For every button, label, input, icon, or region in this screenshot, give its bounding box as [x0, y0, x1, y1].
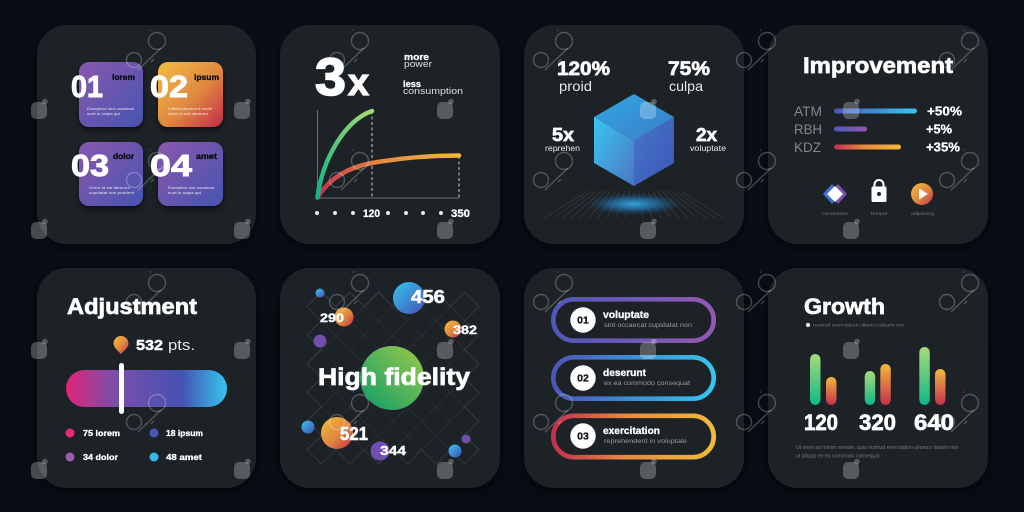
bar chart — [810, 347, 946, 405]
bubble values: 382 — [453, 323, 477, 337]
icon captions: consectetur — [822, 211, 849, 216]
bubble values: 344 — [380, 443, 407, 458]
tile 04: 04 — [150, 148, 193, 183]
bar row ATM: +50% — [927, 104, 962, 118]
stat 5x reprehen: 5x — [552, 125, 574, 145]
x axis scale: 120 — [363, 208, 380, 220]
subheading: nostrud exercitation ullamco laboris nisi — [813, 322, 904, 328]
step 01: sint occaecat cupidatat non — [604, 322, 692, 329]
legend: 18 ipsum — [166, 429, 203, 438]
stat 5x reprehen: reprehen — [545, 144, 580, 153]
bar values: 320 — [859, 410, 896, 435]
icon: play — [911, 183, 933, 205]
tile 02 — [150, 62, 223, 127]
tile 03: dolor — [113, 152, 134, 161]
heading: Adjustment — [67, 294, 198, 319]
tile 02: 02 — [150, 69, 188, 104]
legend: 75 lorem — [83, 429, 120, 438]
headline 3x: x — [348, 62, 369, 104]
watermark: looped line marks — [126, 30, 978, 432]
paragraph: Ut enim ad minim veniam, quis nostrud exercitation ullamco laboris nisi — [796, 445, 958, 451]
panel: numbered steps — [524, 268, 744, 488]
stat 75% culpa — [668, 59, 710, 94]
headline 3x — [315, 48, 369, 107]
more power — [404, 52, 432, 69]
tile 03 — [71, 142, 143, 206]
step 02: ex ea commodo consequat — [604, 380, 690, 387]
stat 120% proid: 120% — [557, 59, 610, 80]
bar row KDZ: +35% — [926, 140, 960, 154]
tile 03: Orem id est laborum — [89, 185, 131, 190]
bar row RBH — [794, 122, 952, 137]
paragraph: ut aliquip ex ea commodo consequat. — [796, 454, 881, 460]
stat 75% culpa: culpa — [669, 78, 703, 94]
step 03 — [553, 416, 714, 457]
step 01 — [553, 299, 714, 341]
less consumption: less — [403, 79, 421, 89]
heading: High fidelity — [318, 364, 471, 391]
panel: numbered tiles — [37, 25, 256, 244]
stat 75% culpa: 75% — [668, 59, 710, 80]
stat 2x voluptate: voluptate — [690, 144, 727, 153]
heading: Improvement — [803, 53, 954, 78]
tile 01: lorem — [112, 73, 135, 82]
tile 03: cupidatat non proident — [89, 190, 135, 195]
tile 02: ipsum — [194, 73, 219, 82]
step 02 — [553, 357, 714, 399]
bubble values: 456 — [411, 287, 445, 307]
step 03: 03 — [577, 431, 589, 443]
panel: adjustment — [37, 268, 256, 488]
legend: 34 dolor — [83, 453, 118, 462]
bar values: 120 — [804, 410, 838, 435]
x axis scale: 350 — [451, 208, 470, 220]
icon: diamond — [823, 184, 847, 204]
paragraph — [796, 445, 958, 460]
bubbles — [302, 282, 470, 460]
line chart — [318, 110, 459, 198]
bubble values — [320, 287, 477, 458]
bar row KDZ: KDZ — [794, 140, 821, 155]
tile 01: Excepteur sint occaecat — [87, 106, 135, 111]
step 02: 02 — [577, 373, 589, 385]
tile 01: sunt in culpa qui — [87, 111, 120, 116]
icon: lock — [872, 180, 886, 202]
bubble values: 521 — [340, 424, 368, 444]
icon: pin — [114, 336, 128, 354]
panel: growth — [768, 268, 988, 488]
icon captions — [822, 211, 935, 216]
tile 01: 01 — [71, 69, 103, 104]
bar row RBH: +5% — [926, 122, 952, 136]
panel: cube stats — [524, 25, 744, 244]
icon captions: tempor — [871, 211, 889, 216]
step 03: exercitation — [603, 426, 660, 437]
tile 03: 03 — [71, 148, 109, 183]
bar values — [804, 410, 954, 435]
stat 120% proid: proid — [559, 78, 592, 94]
stat 5x reprehen — [545, 125, 580, 153]
bar values: 640 — [914, 410, 954, 435]
bar row ATM: ATM — [794, 104, 822, 119]
less consumption — [403, 79, 463, 96]
panel: 3x power chart — [280, 25, 500, 244]
stat 2x voluptate — [690, 125, 727, 153]
slider — [66, 363, 227, 414]
hologram base — [544, 191, 724, 218]
more power: more — [404, 52, 429, 62]
tile 04: sunt in culpa qui — [168, 190, 201, 195]
tile 04: amet — [196, 152, 217, 161]
tile 02: anim id est laborum — [168, 111, 209, 116]
step 01: voluptate — [603, 310, 649, 321]
stat 120% proid — [557, 59, 610, 94]
legend: 48 amet — [166, 453, 202, 462]
bubble values: 290 — [320, 311, 344, 325]
tile 02: Officia deserunt mollit — [168, 106, 213, 111]
tile 01 — [71, 62, 143, 127]
icon captions: adipiscing — [911, 211, 935, 216]
watermark: round logo marks — [31, 99, 860, 479]
tile 04 — [150, 142, 223, 206]
more power: power — [404, 59, 432, 69]
score: 532 — [136, 337, 163, 354]
stat 2x voluptate: 2x — [696, 125, 717, 145]
score — [136, 337, 195, 354]
panel: high fidelity bubbles — [280, 268, 500, 488]
bar row ATM — [794, 104, 962, 119]
panel: improvement — [768, 25, 988, 244]
legend — [66, 428, 203, 462]
score: pts. — [168, 337, 195, 354]
bar row KDZ — [794, 140, 960, 155]
less consumption: consumption — [403, 86, 463, 96]
headline 3x: 3 — [315, 48, 346, 107]
step 02: deserunt — [603, 368, 647, 379]
tile 04: Excepteur sint occaecat — [168, 185, 215, 190]
step 01: 01 — [577, 315, 589, 327]
x axis scale — [315, 208, 470, 220]
bar row RBH: RBH — [794, 122, 822, 137]
heading: Growth — [804, 294, 885, 319]
step 03: reprehenderit in voluptate — [604, 438, 687, 445]
icon: cube — [594, 94, 674, 186]
